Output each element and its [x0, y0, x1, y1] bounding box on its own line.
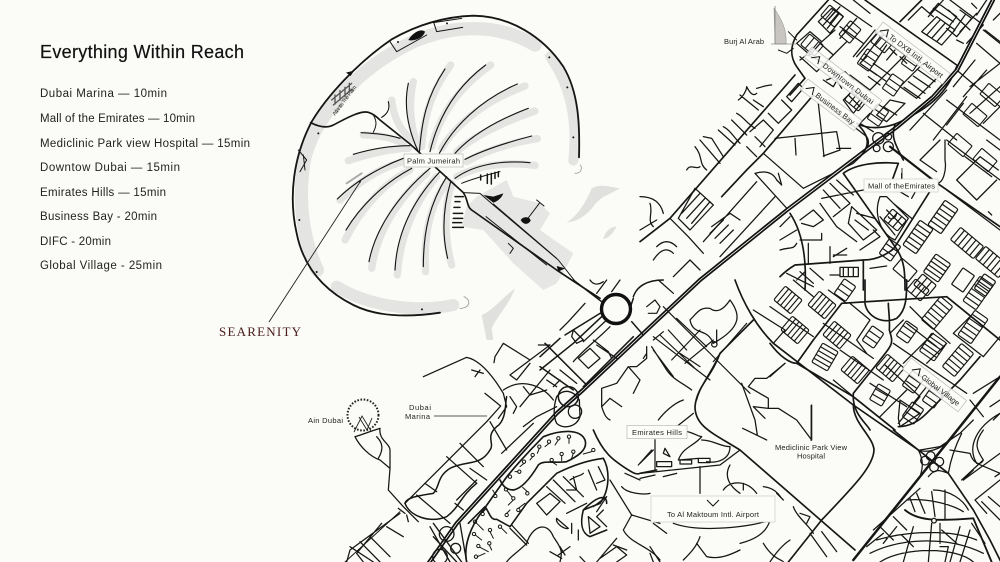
- map: south-east neighbourhood radial: [867, 430, 1000, 562]
- icon: ain dubai wheel: [348, 400, 378, 432]
- label: Emirates Hills: Emirates Hills: [632, 428, 682, 437]
- palm fronds: [337, 65, 532, 270]
- label: Burj Al Arab: Burj Al Arab: [724, 37, 764, 46]
- label: Downtown Dubai: [804, 47, 882, 111]
- map: southern suburb roads: [466, 430, 660, 562]
- label: Palm Jumeirah: [404, 154, 463, 167]
- list of travel times: Mall of the Emirates — 10min: [40, 113, 195, 125]
- map: north coastal strip roads: [640, 32, 868, 277]
- map: west interchange: [430, 523, 467, 562]
- label: Global Village: Global Village: [920, 373, 962, 408]
- label: To Al Maktoum Intl. Airport: To Al Maktoum Intl. Airport: [667, 510, 760, 519]
- label: Mall of the Emirates: Mall of theEmirates: [868, 182, 935, 190]
- label: Business Bay: [800, 79, 862, 131]
- label: Dubai Marina: [405, 403, 487, 421]
- list of travel times: Global Village - 25min: [40, 260, 162, 272]
- list of travel times: Dubai Marina — 10min: [40, 88, 167, 100]
- list of travel times: Business Bay - 20min: [40, 211, 157, 223]
- list of travel times: Downtow Dubai — 15min: [40, 162, 180, 174]
- label: Global Village: [902, 358, 967, 412]
- label: Mediclinic Park View Hospital: [775, 405, 848, 460]
- list of travel times: DIFC - 20min: [40, 236, 111, 248]
- label: Dubai Marina: Marina: [405, 412, 431, 421]
- list of travel times: [40, 88, 250, 272]
- map: big cells beyond mall road: [879, 200, 1000, 296]
- label: Mediclinic Park View Hospital: Hospital: [797, 452, 825, 460]
- label: Atlantis The Palm: Atlantis The Palm: [332, 85, 358, 117]
- grey trunk of the palm: [462, 180, 573, 290]
- brand wordmark: SEARENITY: [219, 324, 302, 339]
- map: mall of the emirates district roads: [780, 140, 1000, 290]
- title: Everything Within Reach: [40, 42, 244, 62]
- map: main highway: [428, 0, 993, 562]
- list of travel times: Emirates Hills — 15min: [40, 187, 166, 199]
- label: Palm Jumeirah: Palm Jumeirah: [407, 156, 460, 166]
- grey sea shapes: [482, 186, 620, 340]
- label: Mall of the Emirates: [864, 168, 938, 192]
- label: To Al Maktoum Intl. Airport: [651, 496, 775, 522]
- map: roads around the marker: [540, 280, 750, 420]
- label: Emirates Hills: [627, 426, 687, 470]
- palm crescent outline: [293, 16, 579, 316]
- map: north-east infill blocks: [801, 5, 1000, 172]
- palm trunk roads: [311, 112, 600, 298]
- palm landmarks: [346, 30, 565, 272]
- atlantis hotel sketch: [332, 83, 352, 105]
- label: Mediclinic Park View Hospital: Mediclinic Park View: [775, 443, 848, 452]
- pointer line to Searenity: [269, 182, 360, 322]
- map: residential roads around global village: [770, 280, 1000, 430]
- map: south-east roads: [640, 280, 1000, 562]
- map: central interchange: [858, 125, 903, 160]
- label: Ain Dubai: Ain Dubai: [308, 416, 343, 425]
- label: Business Bay: Business Bay: [814, 91, 857, 127]
- label: To DXB Intl. Airport: [875, 22, 950, 84]
- label: Downtown Dubai: Downtown Dubai: [821, 61, 876, 106]
- map: residential blocks: [774, 276, 993, 424]
- map: north-east district roads: [790, 0, 1000, 140]
- map: palm jumeirah: [293, 16, 620, 340]
- marker: project location: [602, 294, 630, 324]
- grey land of the palm: [301, 29, 574, 308]
- list of travel times: Mediclinic Park view Hospital — 15min: [40, 138, 250, 150]
- label: Dubai Marina: Dubai: [409, 403, 431, 412]
- label: To DXB Intl. Airport: To DXB Intl. Airport: [887, 33, 946, 80]
- map: west roads: [345, 343, 580, 562]
- map: burj al arab: [771, 6, 796, 44]
- small hooks: [460, 165, 581, 308]
